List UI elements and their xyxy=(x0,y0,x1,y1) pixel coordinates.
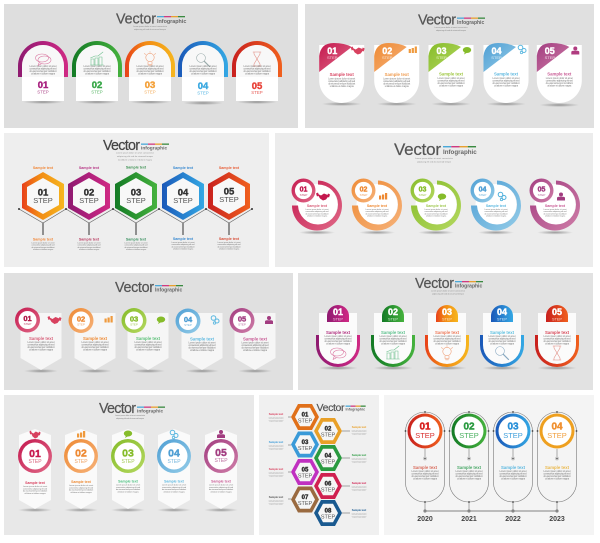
step 05 hexagon: 05 xyxy=(224,186,235,198)
step 04 card: STEP xyxy=(491,55,502,60)
step 05 card xyxy=(232,41,282,104)
step 03 card xyxy=(111,429,145,512)
left side labels: Sample text xyxy=(269,495,283,499)
hexagon 03: 03 xyxy=(302,440,309,446)
step 02 card: 02 xyxy=(388,307,398,317)
hexagon 03 xyxy=(291,432,319,458)
step 05 card xyxy=(204,429,238,512)
step 04 card: Sample text xyxy=(164,480,185,484)
step 03 ring xyxy=(410,178,461,234)
step 01 ring: STEP xyxy=(300,193,307,197)
step 02 hexagon: Sample text xyxy=(79,166,100,170)
step 03 capsule: 03 xyxy=(507,422,519,432)
step 02 card: STEP xyxy=(74,459,88,465)
right side labels: Sample text xyxy=(352,453,366,457)
step 01 card: Sample text xyxy=(25,481,46,485)
step 01 card: 01 xyxy=(38,80,49,91)
hexagon 08: STEP xyxy=(321,514,336,520)
step 05 card xyxy=(230,308,276,373)
step 03 card: 03 xyxy=(145,80,155,91)
step 02 card: Sample text xyxy=(381,330,406,335)
step 01 card: STEP xyxy=(37,90,49,94)
step 03 card xyxy=(122,308,168,373)
step 05 card xyxy=(535,305,579,370)
step 04 card: 04 xyxy=(198,81,209,92)
title: adipiscing elit sed do eiusmod tempor xyxy=(417,160,451,164)
step 02 hexagon: Sample text xyxy=(79,238,100,242)
right side labels: Sample text xyxy=(352,481,366,485)
title: Vector xyxy=(415,276,454,292)
step 05 hexagon: STEP xyxy=(219,195,239,204)
step 02 hexagon: STEP xyxy=(79,196,99,205)
hexagon 06: 06 xyxy=(325,482,332,488)
step 01 card: Sample text xyxy=(326,330,351,335)
step 05 card: Sample text xyxy=(211,480,232,484)
step 04 hexagon: STEP xyxy=(173,196,193,205)
step 01 card: STEP xyxy=(327,55,338,60)
step 02 capsule: 2021 xyxy=(461,516,477,523)
title xyxy=(316,402,366,414)
step 05 card: 05 xyxy=(238,314,246,324)
step 01 capsule xyxy=(405,411,445,523)
hexagon 07: STEP xyxy=(298,501,313,507)
step 02 card: STEP xyxy=(388,318,398,322)
step 05 card: Sample text xyxy=(243,336,268,342)
step 01 card: 01 xyxy=(29,448,41,460)
title: Infographic xyxy=(157,19,186,25)
title: Infographic xyxy=(155,288,182,294)
right side labels: Sample text xyxy=(352,425,366,429)
panel: hexagon steps xyxy=(4,133,269,267)
step 05 card: 05 xyxy=(545,46,555,56)
step 03 card: 03 xyxy=(130,314,138,324)
hexagon 05: STEP xyxy=(298,474,313,480)
step 02 card: Sample text xyxy=(71,480,92,484)
panel: U-shaped cards xyxy=(298,273,593,390)
title: Vector xyxy=(418,12,456,28)
step 01 ring xyxy=(292,178,342,234)
right side labels xyxy=(342,425,367,519)
step 04 card: 04 xyxy=(168,448,180,460)
hexagon 04: STEP xyxy=(321,460,336,466)
title: Lorem ipsum dolor sit amet consectetur xyxy=(434,26,468,29)
step 02 hexagon xyxy=(68,166,110,251)
step 01 card: Sample text xyxy=(330,72,354,77)
step 03 card: 03 xyxy=(436,46,447,56)
step 02 card xyxy=(374,43,419,106)
title: Lorem ipsum dolor sit amet consectetur xyxy=(115,414,145,417)
step 05 card: 05 xyxy=(552,307,562,317)
step 02 ring: Sample text xyxy=(367,204,388,208)
title: Infographic xyxy=(137,408,163,414)
step 03 card: STEP xyxy=(442,318,452,322)
hexagon 07 xyxy=(291,486,319,512)
step 05 card: Sample text xyxy=(547,72,572,76)
title xyxy=(99,401,165,420)
left side labels: Sample text xyxy=(269,467,283,471)
step 05 ring: STEP xyxy=(538,193,545,197)
title: Vector xyxy=(394,140,441,159)
step 03 card xyxy=(125,41,175,104)
step 05 card: Sample text xyxy=(545,330,570,335)
step 02 ring: 02 xyxy=(360,186,367,194)
step 02 ring: STEP xyxy=(360,193,367,197)
title: Lorem ipsum dolor sit amet consectetur xyxy=(116,152,154,154)
step 03 capsule: STEP xyxy=(503,431,523,440)
step 02 card: Sample text xyxy=(83,336,108,341)
panel: ring steps xyxy=(275,133,593,267)
panel: capsule timeline 2020-2023 xyxy=(384,395,594,535)
step 04 capsule: Sample text xyxy=(545,465,570,470)
title xyxy=(394,140,477,164)
step 02 card: STEP xyxy=(77,322,85,326)
right side labels: Sample text xyxy=(352,508,366,512)
step 03 card: STEP xyxy=(130,322,138,326)
step 02 card xyxy=(64,429,98,512)
hexagon 07: 07 xyxy=(302,495,309,501)
step 05 ring xyxy=(530,178,580,234)
hexagon 06: STEP xyxy=(321,488,336,494)
step 01 hexagon: 01 xyxy=(38,188,49,198)
title xyxy=(103,138,169,162)
title: Lorem ipsum dolor sit amet consectetur xyxy=(133,25,167,28)
step 03 card xyxy=(425,305,469,370)
step 04 ring: 04 xyxy=(479,186,486,194)
hexagon 04 xyxy=(314,445,342,471)
hexagon 01: STEP xyxy=(298,418,313,424)
step 04 ring: Sample text xyxy=(486,204,507,208)
step 04 card xyxy=(480,305,524,370)
step 03 card: STEP xyxy=(436,55,447,60)
title: Vector xyxy=(115,280,154,296)
step 03 ring: Sample text xyxy=(426,204,447,208)
step 05 card xyxy=(537,43,582,107)
panel: pentagon cards with circle badges xyxy=(4,273,293,390)
step 05 card: STEP xyxy=(552,318,562,322)
title: adipiscing elit sed do eiusmod tempor xyxy=(116,417,144,420)
step 04 card: Sample text xyxy=(494,72,519,76)
step 02 card: 02 xyxy=(92,80,102,91)
step 03 capsule xyxy=(493,411,533,523)
step 03 hexagon: STEP xyxy=(126,196,146,205)
step 04 card: STEP xyxy=(497,318,507,322)
title: Vector xyxy=(316,402,345,414)
step 01 capsule: STEP xyxy=(415,431,435,440)
step 03 card: Sample text xyxy=(118,480,139,484)
hexagon 05 xyxy=(291,459,319,485)
step 05 ring: 05 xyxy=(538,186,545,194)
hexagon 02: 02 xyxy=(325,426,332,432)
step 04 hexagon: Sample text xyxy=(173,237,194,241)
title: adipiscing elit sed do eiusmod tempor xyxy=(432,292,464,296)
step 04 card: STEP xyxy=(197,90,209,96)
step 04 card xyxy=(157,429,191,512)
step 03 capsule: 2022 xyxy=(505,516,521,523)
step 05 card: STEP xyxy=(251,90,263,95)
title: Vector xyxy=(116,12,156,28)
step 01 card: 01 xyxy=(23,314,32,323)
title: Infographic xyxy=(443,149,477,156)
title xyxy=(116,12,186,31)
step 01 hexagon: Sample text xyxy=(33,238,54,242)
hexagon 08: 08 xyxy=(325,508,332,514)
step 01 hexagon: Sample text xyxy=(33,166,54,170)
title: Vector xyxy=(103,138,140,154)
title: Infographic xyxy=(457,20,484,26)
hexagon 01: 01 xyxy=(302,412,309,418)
step 03 hexagon xyxy=(115,166,157,251)
title: Lorem ipsum dolor sit amet consectetur xyxy=(415,157,453,160)
step 04 card: STEP xyxy=(184,323,192,327)
step 01 card: STEP xyxy=(28,459,42,465)
step 01 ring: 01 xyxy=(300,186,307,194)
step 04 card: STEP xyxy=(167,459,181,465)
step 05 card: 05 xyxy=(215,447,227,459)
step 03 card xyxy=(428,43,474,106)
step 05 card: STEP xyxy=(545,55,555,60)
hexagon 02: STEP xyxy=(321,432,336,438)
step 05 card: STEP xyxy=(238,322,246,326)
step 02 card xyxy=(72,41,122,104)
step 04 card xyxy=(176,308,222,373)
step 04 card: 04 xyxy=(184,315,193,324)
panel: rounded cards with corner tabs xyxy=(305,4,594,128)
step 04 capsule xyxy=(537,411,577,523)
hexagon 06 xyxy=(314,473,342,499)
step 04 ring xyxy=(470,178,521,234)
step 03 ring: STEP xyxy=(419,193,426,197)
step 01 card xyxy=(319,43,365,106)
step 03 hexagon: Sample text xyxy=(126,166,147,170)
step 01 card: STEP xyxy=(333,318,343,322)
step 03 ring: 03 xyxy=(419,186,426,194)
step 04 capsule: 04 xyxy=(551,422,563,432)
step 05 ring: Sample text xyxy=(545,204,566,208)
step 04 card: Sample text xyxy=(190,336,215,342)
title: Infographic xyxy=(346,408,365,412)
step 01 hexagon: STEP xyxy=(33,196,53,205)
timeline axis xyxy=(423,509,559,513)
step 03 hexagon: 03 xyxy=(131,188,141,198)
step 02 hexagon: 02 xyxy=(84,188,94,198)
title xyxy=(115,280,183,296)
step 03 capsule: Sample text xyxy=(501,465,526,470)
step 04 card: Sample text xyxy=(490,330,515,335)
hexagon 01 xyxy=(291,404,319,430)
title: adipiscing elit sed do eiusmod tempor xyxy=(117,155,153,158)
title: adipiscing elit sed do eiusmod tempor xyxy=(134,28,166,31)
step 02 capsule xyxy=(449,411,489,523)
step 01 card: 01 xyxy=(327,46,337,56)
step 02 capsule: STEP xyxy=(459,431,479,440)
step 01 card xyxy=(18,41,68,104)
step 01 capsule: 2020 xyxy=(417,516,433,523)
step 02 card xyxy=(68,308,116,373)
step 01 card xyxy=(18,429,52,512)
step 05 hexagon xyxy=(208,166,250,250)
left side labels: Sample text xyxy=(269,412,283,416)
step 01 ring: Sample text xyxy=(307,204,328,208)
step 04 hexagon xyxy=(162,166,204,250)
step 03 card: STEP xyxy=(144,90,156,94)
hexagon 05: 05 xyxy=(302,468,309,474)
title: Vector xyxy=(99,401,136,417)
step 04 capsule: 2023 xyxy=(549,516,565,523)
step 02 card xyxy=(371,305,415,370)
hexagon 08 xyxy=(314,500,342,526)
step 04 hexagon: Sample text xyxy=(173,166,194,170)
step 04 hexagon: 04 xyxy=(178,188,189,198)
step 02 card: 02 xyxy=(382,46,392,56)
step 03 card: 03 xyxy=(442,307,452,317)
step 03 card: Sample text xyxy=(439,72,464,76)
title xyxy=(418,12,485,32)
title: incididunt ut labore et dolore magna xyxy=(118,158,153,162)
step 04 card: 04 xyxy=(497,307,507,317)
step 05 card: 05 xyxy=(252,81,263,92)
hexagon 04: 04 xyxy=(325,454,332,460)
step 03 card: Sample text xyxy=(435,330,460,335)
step 01 card: Sample text xyxy=(29,336,54,341)
step 03 card: STEP xyxy=(121,459,135,465)
step 01 capsule: Sample text xyxy=(413,465,438,470)
step 03 hexagon: Sample text xyxy=(126,238,147,242)
panel: eight hexagon column xyxy=(259,395,379,535)
step 03 card: 03 xyxy=(122,448,134,460)
title: Infographic xyxy=(455,284,482,290)
title xyxy=(415,276,483,296)
step 02 ring xyxy=(352,178,402,234)
step 04 card: 04 xyxy=(491,46,502,56)
step 05 card: STEP xyxy=(214,458,228,464)
step 02 card: STEP xyxy=(382,55,393,60)
step 02 capsule: Sample text xyxy=(457,465,482,470)
step 01 card xyxy=(15,308,62,373)
title: Lorem ipsum dolor sit amet consectetur xyxy=(431,290,465,292)
step 05 hexagon: Sample text xyxy=(219,166,240,170)
step 04 ring: STEP xyxy=(479,193,486,197)
step 03 card: Sample text xyxy=(136,336,161,341)
title: Infographic xyxy=(141,146,167,152)
step 01 card: 01 xyxy=(333,307,343,317)
left side labels xyxy=(269,412,291,506)
step 01 card xyxy=(316,305,360,370)
connector zigzag xyxy=(18,208,253,235)
left side labels: Sample text xyxy=(269,440,283,444)
step 04 card xyxy=(178,41,228,105)
title: adipiscing elit sed do eiusmod tempor xyxy=(436,29,466,32)
hexagon 03: STEP xyxy=(298,446,313,452)
step 01 hexagon xyxy=(22,166,64,251)
step 02 card: Sample text xyxy=(385,72,409,77)
step 05 hexagon: Sample text xyxy=(219,237,240,241)
step 04 capsule: STEP xyxy=(547,431,567,440)
step 02 capsule: 02 xyxy=(463,422,475,432)
step 02 card: 02 xyxy=(77,314,85,324)
hexagon 02 xyxy=(314,418,342,444)
step 02 card: 02 xyxy=(75,448,87,460)
panel: arch cards xyxy=(4,4,298,128)
step 01 capsule: 01 xyxy=(419,422,431,432)
step 02 card: STEP xyxy=(91,90,103,94)
panel: tall cards with large circles xyxy=(4,395,254,535)
step 01 card: STEP xyxy=(24,322,31,326)
step 04 card xyxy=(484,43,528,106)
